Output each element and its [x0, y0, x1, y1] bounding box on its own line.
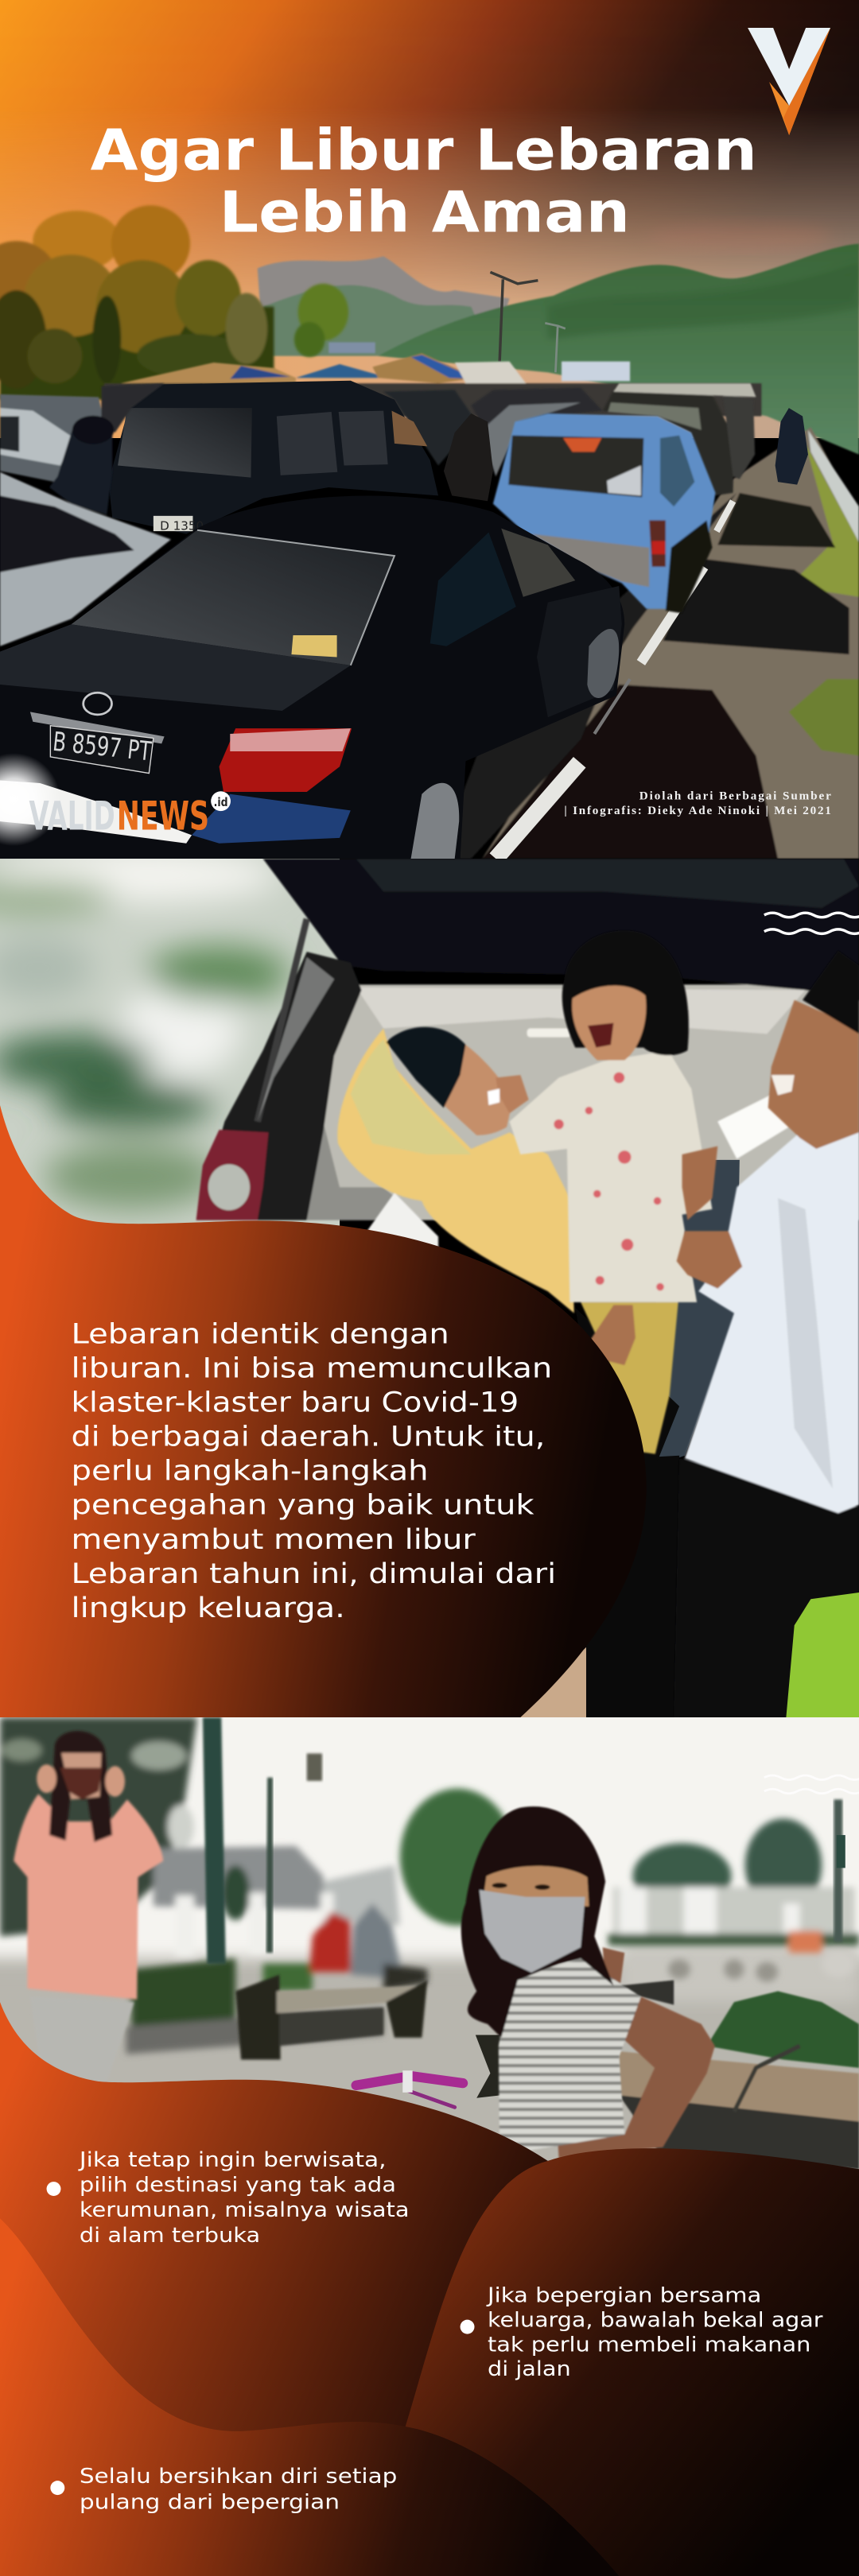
tip: bring food from home: di jalan: [488, 2357, 571, 2381]
credit line: | Infografis: Dieky Ade Ninoki | Mei 2021: [564, 804, 831, 817]
photo: lane marking: [496, 501, 733, 859]
photo: woman's leg: [510, 1647, 586, 1717]
photo: blurred garden background: [0, 848, 340, 1242]
credit line: [565, 791, 831, 817]
text block: intro paragraph: [72, 1319, 556, 1624]
photo: guardrail, gravel and road: [438, 427, 859, 859]
photo: tents and roadside stalls: [104, 342, 761, 416]
photo: bench: [235, 1975, 427, 2059]
logo: VALIDNEWS wordmark: [29, 791, 231, 830]
photo: blurred park background: [0, 1717, 859, 2199]
tip: clean up after travelling: pulang dari bepergian: [80, 2490, 340, 2514]
photo: utility poles: [490, 272, 566, 372]
text block: intro paragraph: klaster-klaster baru Covid-19: [72, 1387, 519, 1419]
photo: black van: [108, 381, 438, 534]
photo: woman in yellow scarf: [337, 1027, 574, 1313]
decoration: faint waves: [764, 1775, 859, 1794]
photo: girl laughing: [510, 930, 712, 1454]
text block: intro paragraph: perlu langkah-langkah: [72, 1456, 429, 1488]
title: [91, 126, 752, 232]
title: Agar Libur Lebaran: [91, 118, 757, 184]
photo: bench and plants on the right: [619, 1980, 859, 2169]
tip: clean up after travelling: Selalu bersihkan diri setiap: [80, 2465, 397, 2489]
photo: blue jeep: [493, 413, 716, 613]
photo: car tailgate and interior: [196, 859, 859, 1220]
tip: destination without crowds: kerumunan, misalnya wisata: [80, 2198, 410, 2222]
tip: bring food from home: keluarga, bawalah bekal agar: [488, 2309, 823, 2333]
panel: safety tips: [0, 1717, 859, 2576]
panel: family intro: [0, 848, 859, 1717]
photo: black Toyota sedan: [0, 496, 624, 859]
shape: upper-left gradient blob: [0, 2002, 548, 2484]
photo: smiling man: [674, 951, 859, 1717]
text block: intro paragraph: lingkup keluarga.: [72, 1593, 345, 1624]
photo: green suitcase: [786, 1593, 859, 1717]
text block: intro paragraph: pencegahan yang baik untuk: [72, 1489, 534, 1521]
logo: VALIDNEWS wordmark: .id: [214, 795, 228, 809]
text: licence plate: B 8597 PT: [52, 726, 154, 767]
tip: destination without crowds: Jika tetap ingin berwisata,: [78, 2148, 387, 2172]
shape: lower-left gradient blob: [0, 2218, 619, 2576]
tip: destination without crowds: di alam terbuka: [80, 2224, 260, 2248]
photo: bicycle handlebar: [356, 2070, 463, 2107]
text block: intro paragraph: Lebaran tahun ini, dimulai dari: [72, 1558, 556, 1590]
photo: motorbike rider: [775, 408, 808, 485]
photo: woman in pink sweater adjusting mask: [14, 1731, 163, 2089]
text block: intro paragraph: di berbagai daerah. Untuk itu,: [72, 1421, 545, 1453]
logo: V mark: [748, 28, 830, 135]
photo: trees on the left: [0, 205, 348, 400]
title: Lebih Aman: [220, 179, 630, 245]
tip: bring food from home: [461, 2284, 823, 2381]
photo: pedestrian beside cars: [444, 413, 493, 501]
credit line: Diolah dari Berbagai Sumber: [639, 789, 831, 803]
shape: orange gradient blob: [0, 1105, 647, 1717]
photo: black van: D 1350: [160, 519, 204, 533]
panel: traffic jam hero: [0, 0, 859, 859]
photo: bench behind girl: [476, 2035, 501, 2098]
photo: mountains: [258, 244, 859, 455]
photo: luggage and dark car floor: [548, 1160, 740, 1717]
tip: destination without crowds: [47, 2148, 410, 2248]
shape: right gradient blob: [406, 2148, 859, 2576]
text block: intro paragraph: menyambut momen libur: [72, 1524, 476, 1556]
tip: bring food from home: Jika bepergian bersama: [486, 2284, 761, 2308]
photo: silver cars on the left: [0, 383, 171, 646]
text block: intro paragraph: Lebaran identik dengan: [72, 1319, 449, 1351]
tip: bring food from home: tak perlu membeli makanan: [488, 2334, 810, 2357]
logo: VALIDNEWS wordmark: NEWS: [117, 793, 209, 840]
text block: intro paragraph: liburan. Ini bisa memunculkan: [72, 1352, 552, 1384]
logo: VALIDNEWS wordmark: VALID: [29, 793, 115, 840]
photo: parked cars far behind: [383, 383, 756, 495]
decoration: white waves: [764, 913, 859, 933]
photo: girl in grey face mask: [461, 1806, 715, 2158]
tip: clean up after travelling: [50, 2465, 397, 2514]
photo: sky with orange gradient: [0, 0, 859, 438]
tip: destination without crowds: pilih destinasi yang tak ada: [80, 2173, 396, 2197]
